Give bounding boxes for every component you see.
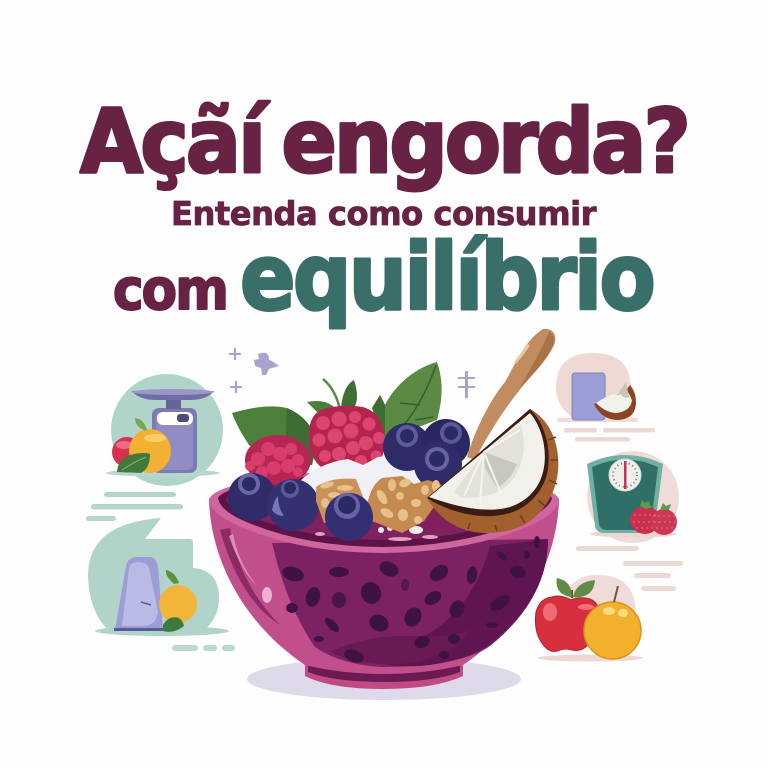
dashes left lower	[172, 645, 235, 651]
leaves	[232, 362, 442, 465]
lines left upper	[86, 492, 183, 521]
raspberry large	[309, 406, 385, 479]
raspberry small	[245, 435, 311, 485]
heading word: equilíbrio: equilíbrio	[240, 224, 653, 331]
icon: kitchen scale with fruit	[106, 374, 223, 486]
subtitle: Entenda como consumir: Entenda como consumir	[171, 194, 597, 233]
icon: ice block with coconut	[556, 353, 638, 422]
icon: apple and orange	[535, 575, 643, 662]
title: Açãí engorda?: Açãí engorda?	[80, 90, 688, 193]
blueberry front	[325, 493, 373, 541]
bowl shadow	[247, 658, 521, 700]
lines right middle	[576, 546, 683, 591]
heading word: com: com	[113, 258, 227, 323]
icon: bathroom scale with raspberries	[587, 451, 679, 543]
icon: blender jar with fruit	[88, 518, 229, 636]
sparkles	[229, 348, 475, 398]
coconut half	[427, 409, 558, 533]
açaí seeds	[281, 536, 540, 665]
coconut flakes	[298, 455, 434, 511]
blueberries	[228, 419, 470, 531]
bowl	[209, 470, 559, 689]
lines right upper	[564, 428, 655, 442]
spoon	[467, 329, 555, 460]
granola	[316, 476, 442, 533]
